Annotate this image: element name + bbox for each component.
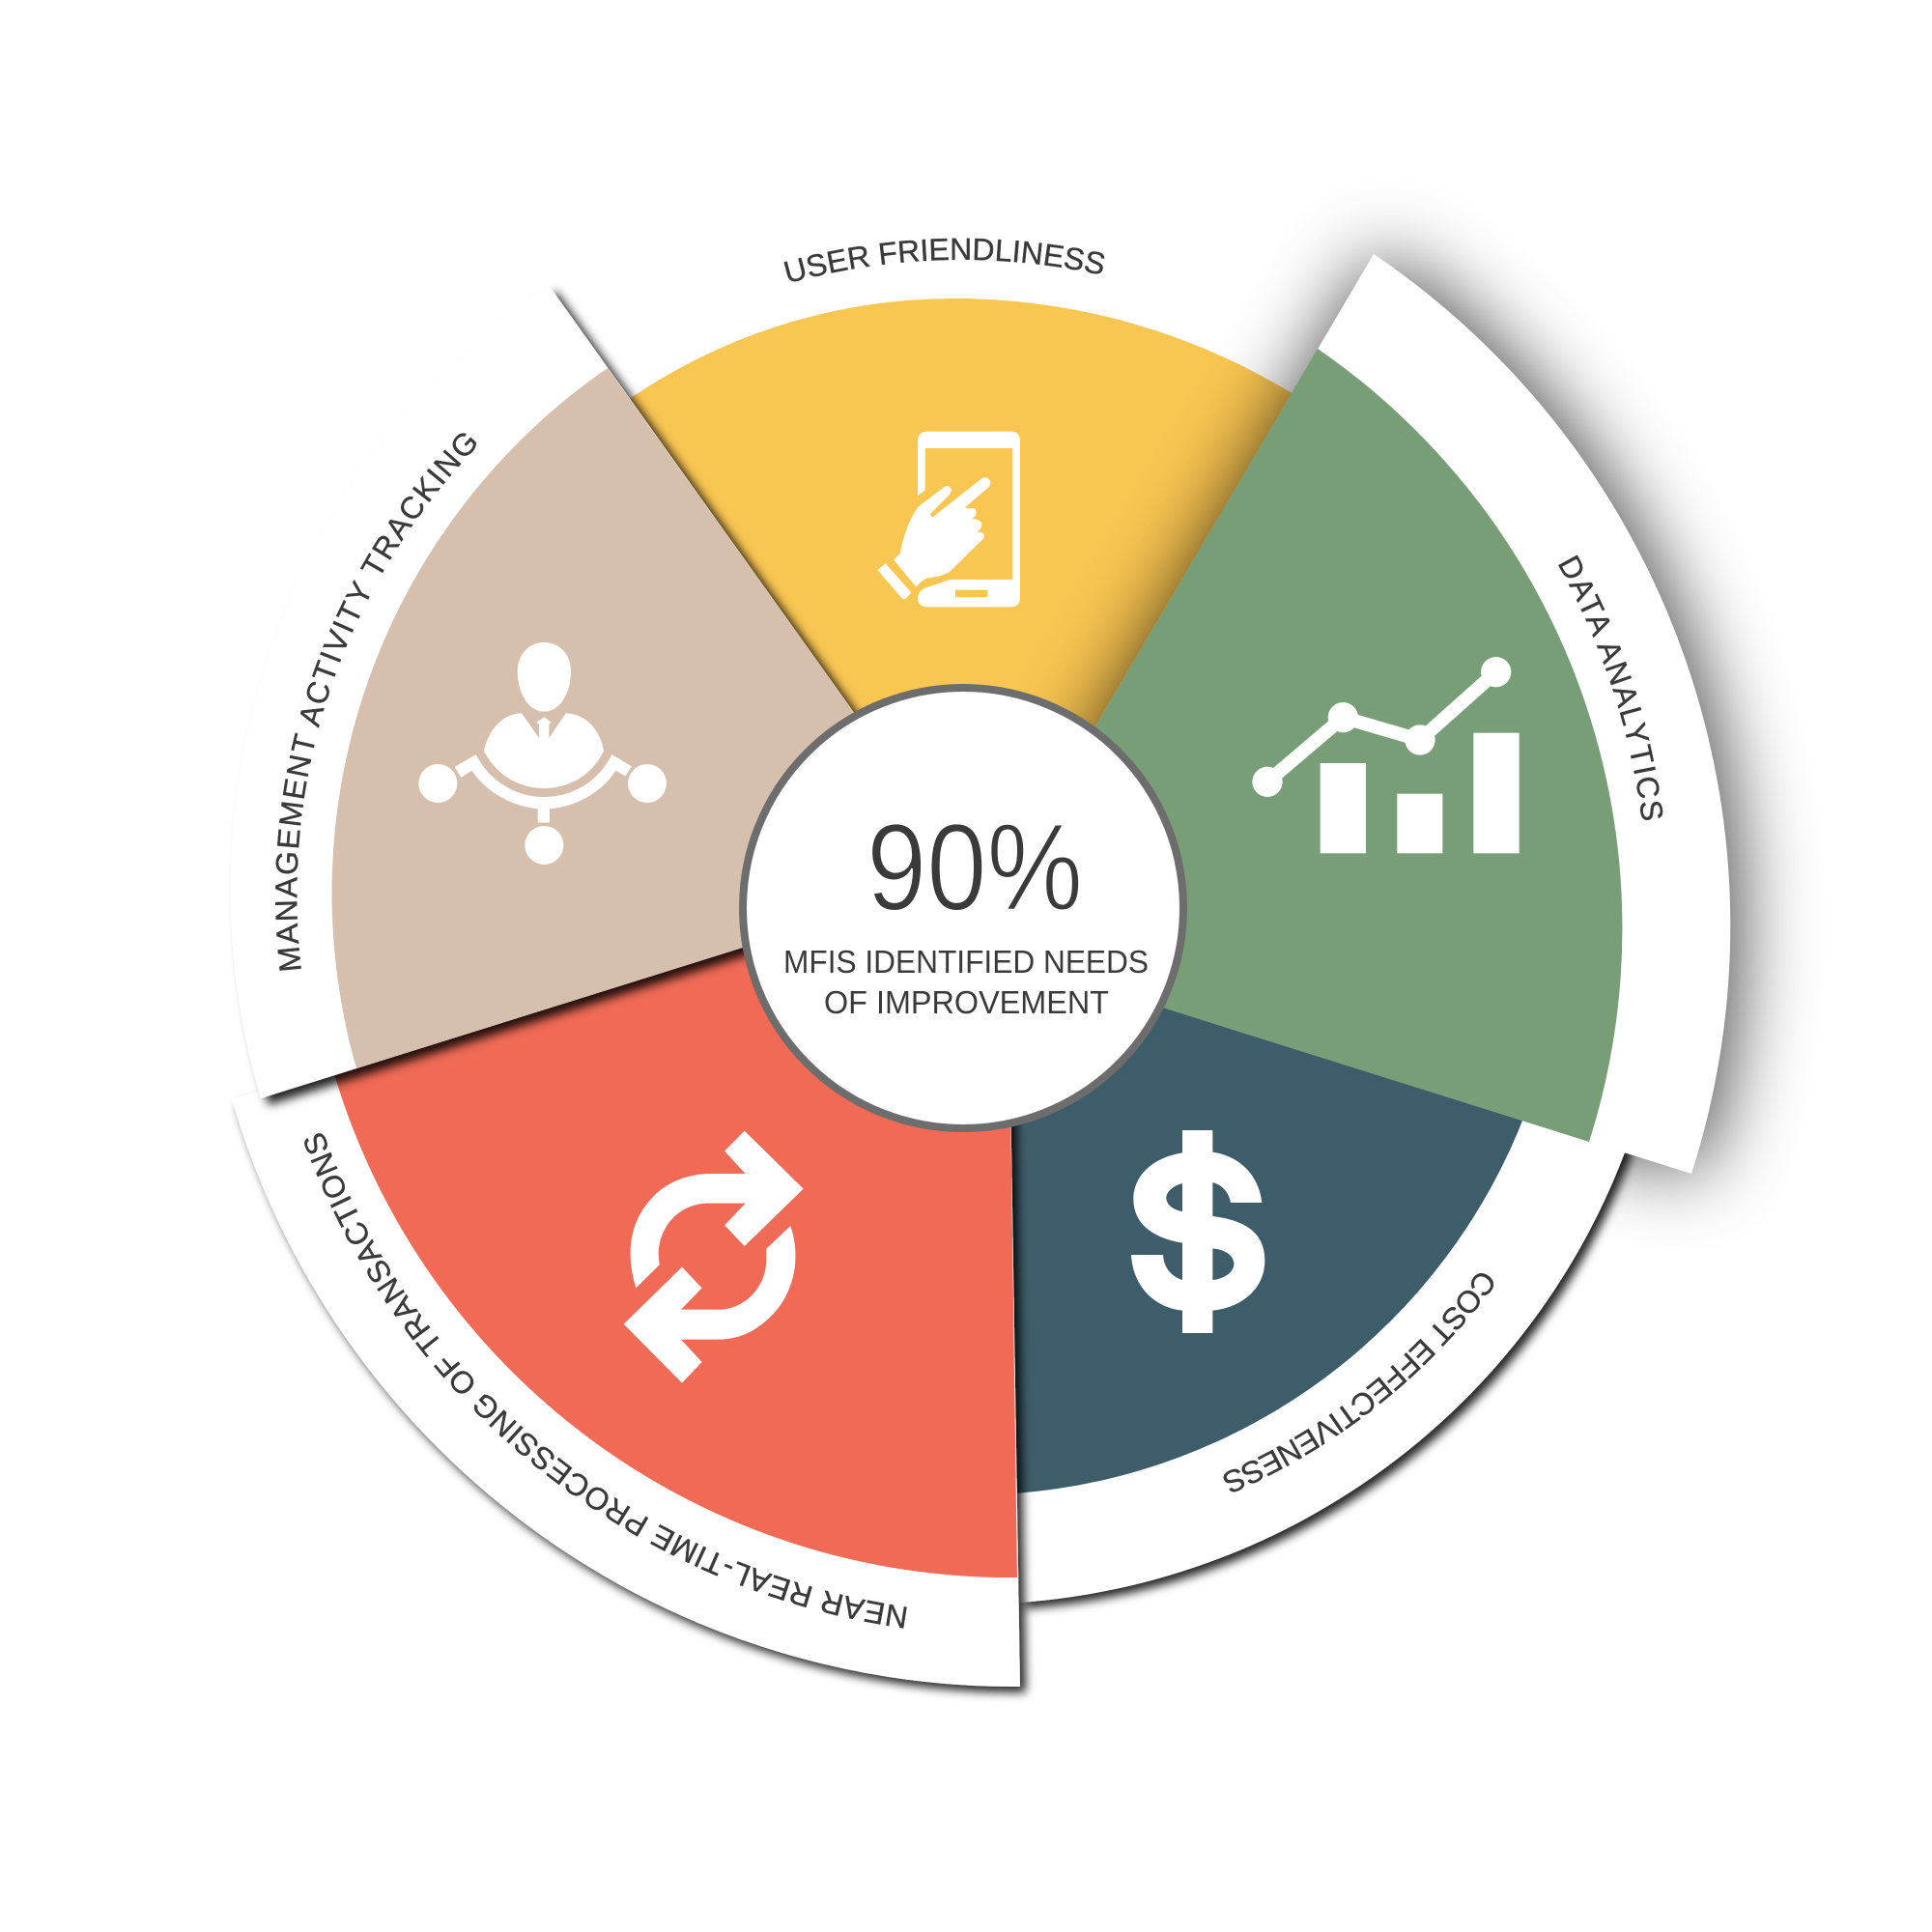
label: data analytics: DATA ANALYTICS [1558,554,1663,821]
panel: data analytics [1095,254,1731,1174]
center circle [743,688,1183,1128]
icon: manager with network nodes [418,642,667,865]
panel: management activity tracking [230,286,864,1111]
red segment outer band [232,876,1020,1687]
icon: dollar sign [1131,1130,1264,1333]
label: cost effectiveness: COST EFFECTIVENESS [1223,1273,1493,1492]
label: management activity tracking: MANAGEMENT ACTIVITY TRACKING [275,433,476,971]
label: near real-time processing of transactions: NEAR REAL-TIME PROCESSING OF TRANSACTIONS [304,1133,907,1629]
green segment [966,349,1622,1142]
icon: line and bar chart [1252,657,1520,853]
teal segment outer band [966,946,1628,1603]
panel: user friendliness [630,238,1292,726]
red segment [334,876,1017,1577]
statistic: 90%: 90% [867,799,1083,937]
beige segment [332,368,971,1068]
caption: OF IMPROVEMENT [824,984,1109,1020]
yellow segment [618,298,1333,908]
teal segment [966,946,1526,1493]
shadow cast by the data analytics panel [972,254,1736,1174]
icon: hand touching phone [877,432,1020,607]
beige segment outer band [231,285,971,1098]
panel: near real-time processing [232,948,1034,1700]
green segment outer band [966,254,1730,1174]
yellow segment outer band [555,189,1372,908]
caption: MFIS IDENTIFIED NEEDS [783,944,1149,980]
label: user friendliness: USER FRIENDLINESS [784,238,1105,282]
caption [783,944,1149,1020]
panel: cost effectiveness [1010,1009,1638,1615]
icon: refresh arrows [624,1131,804,1383]
